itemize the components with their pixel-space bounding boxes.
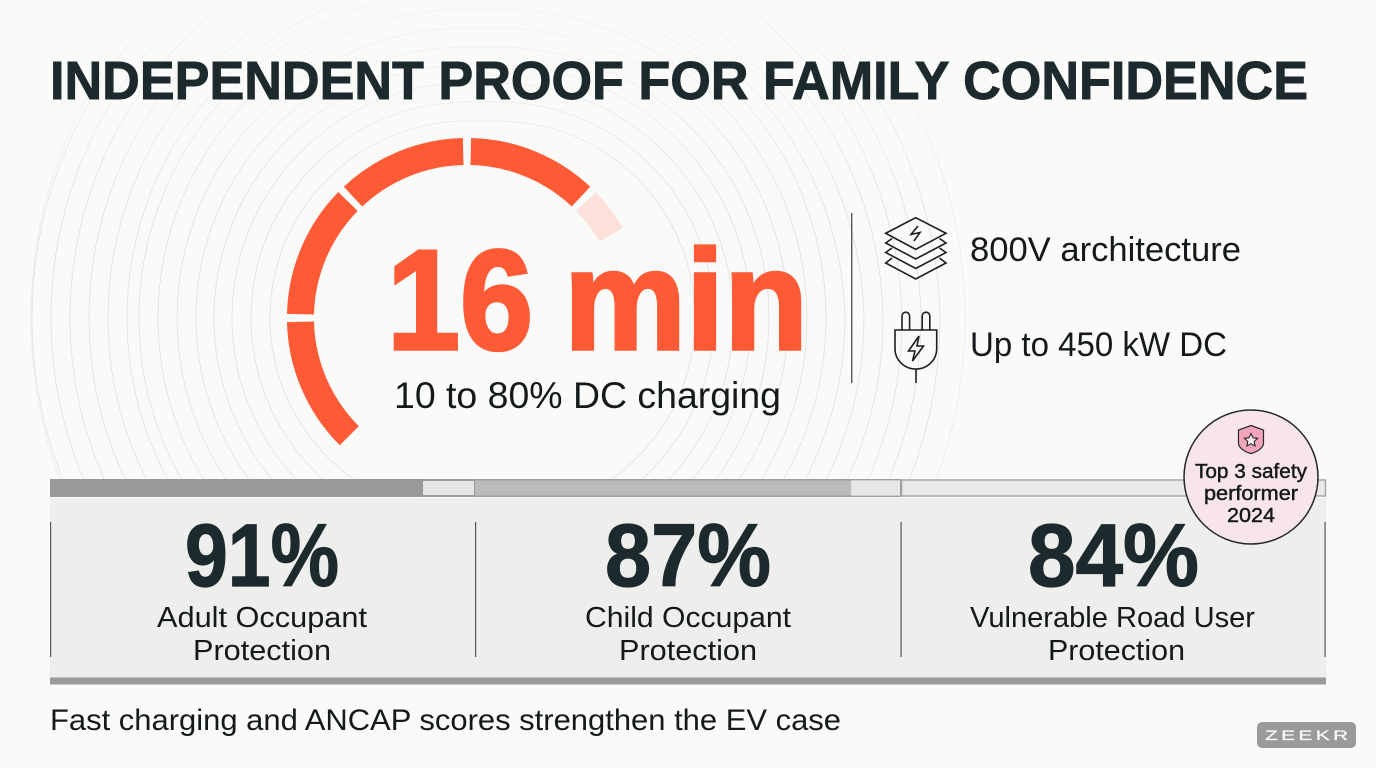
score: child occupant: Child Occupant [585, 602, 791, 634]
badge text [1195, 460, 1308, 527]
panel: ANCAP safety scores [50, 479, 1326, 684]
score bar: vulnerable road user [902, 480, 1326, 496]
score: vulnerable road user: Vulnerable Road User [970, 602, 1255, 634]
score: adult occupant: Adult Occupant [157, 602, 367, 634]
headline metric: 16 min [387, 221, 808, 380]
panel background [50, 498, 1326, 678]
badge text: 2024 [1227, 504, 1275, 527]
score: vulnerable road user: 84% [1028, 505, 1199, 605]
takeaway text: Fast charging and ANCAP scores strengthen the EV case [50, 704, 841, 737]
vertical divider [851, 213, 852, 383]
score: vulnerable road user: Protection [1048, 635, 1185, 667]
score: child occupant [585, 505, 791, 667]
logo: ZEEKR [1257, 722, 1356, 748]
feature: 800V architecture: 800V architecture [970, 231, 1241, 269]
feature: up to 450 kW DC: Up to 450 kW DC [970, 326, 1227, 364]
column dividers [50, 522, 1326, 657]
score: child occupant: 87% [605, 505, 771, 605]
title: INDEPENDENT PROOF FOR FAMILY CONFIDENCE [50, 51, 1308, 111]
icon: charging plug [895, 312, 937, 383]
score: adult occupant: 91% [185, 505, 339, 605]
metric caption: 10 to 80% DC charging [394, 375, 781, 416]
score: child occupant: Protection [619, 635, 757, 667]
logo: ZEEKR: ZEEKR [1265, 727, 1351, 743]
badge: top 3 safety performer [1184, 410, 1318, 544]
score bar: adult [50, 479, 475, 497]
score: adult occupant: Protection [193, 635, 331, 667]
score: adult occupant [157, 505, 367, 667]
gauge: charging progress arc [300, 152, 611, 436]
score: vulnerable road user [970, 505, 1255, 667]
score bar: child [475, 479, 902, 497]
headline metric: 16 min: 16 [387, 221, 533, 380]
badge text: Top 3 safety [1195, 460, 1308, 483]
headline metric: 16 min: min [564, 221, 808, 380]
badge text: performer [1204, 482, 1298, 505]
icon: shield with star [1238, 426, 1264, 454]
icon: stacked battery layers [886, 218, 946, 279]
